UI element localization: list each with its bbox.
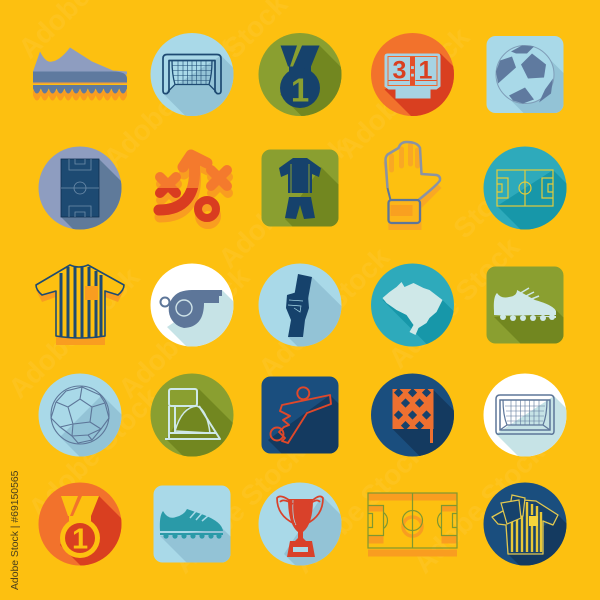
icon: referee shirt (36, 265, 124, 345)
icon: vertical pitch on periwinkle circle (38, 146, 122, 230)
watermarks: Adobe Stock (212, 131, 356, 274)
icon: pitch on teal circle (484, 146, 566, 230)
watermarks: Stock (447, 168, 523, 244)
icon: boot on green square (486, 266, 564, 344)
icon: Brazil map on teal circle (371, 264, 454, 346)
icon: goal on white circle (484, 374, 566, 456)
icon: outlined ball on blue circle (38, 374, 122, 456)
icon: gold medal on orange circle: 1 (72, 524, 88, 556)
watermarks: Adobe Stock (382, 231, 526, 374)
score digits: 3 (393, 56, 406, 84)
watermarks: Adobe Stock (287, 436, 431, 579)
icon: whistle on white circle (150, 264, 234, 346)
icon: gold medal on orange circle (38, 482, 122, 566)
tactic shadow (160, 162, 228, 225)
icon: scoreboard on orange circle (371, 33, 454, 116)
watermarks: Adobe Stock (167, 436, 311, 579)
icon: medal on green circle (258, 33, 342, 116)
icon: football boot grey (33, 48, 127, 100)
credit text: Adobe Stock | #69150565 (10, 470, 21, 590)
pocket (85, 286, 98, 300)
cards (508, 495, 525, 518)
icon: soccer ball on blue square (486, 36, 564, 113)
watermarks: Adobe Stock (22, 381, 166, 524)
icon: medal on green circle: 1 (291, 72, 309, 108)
watermarks: Adobe Stock (252, 241, 396, 384)
glove wrist band (388, 200, 420, 223)
icon: kit on green square (262, 150, 338, 226)
icon: teal shoe on blue square (154, 486, 230, 562)
score colon: : (409, 60, 416, 82)
icon: referee shirt on navy circle (484, 482, 566, 566)
tactic marks red lower (154, 188, 220, 222)
watermarks: Adobe Stock (2, 261, 146, 404)
watermarks: Adobe Stock (407, 436, 551, 579)
icon: goal on blue circle (150, 33, 234, 116)
navy shirt (492, 500, 558, 554)
icon: red card hand on blue circle (258, 264, 342, 346)
watermarks: Adobe Stock (97, 31, 241, 174)
icon: corner flag on green circle (150, 374, 234, 456)
icon: scoreboard on orange circle: 1 (419, 56, 433, 84)
tactic marks orange (159, 155, 227, 210)
icon: trophy on blue circle (258, 482, 342, 566)
watermarks: Adobe Stock (112, 261, 256, 404)
pitch shadow bands (368, 494, 457, 556)
glove body (386, 142, 440, 200)
icon: goalkeeper glove (384, 142, 442, 230)
icon: tactics arrows (159, 155, 228, 225)
icon: linesman flag on navy circle (371, 374, 454, 456)
watermarks: Adobe Stock (332, 21, 476, 164)
icon: pitch on background (368, 493, 457, 556)
icon: player on navy square (262, 376, 338, 454)
glove shadow (384, 148, 442, 230)
pocket (529, 516, 538, 526)
